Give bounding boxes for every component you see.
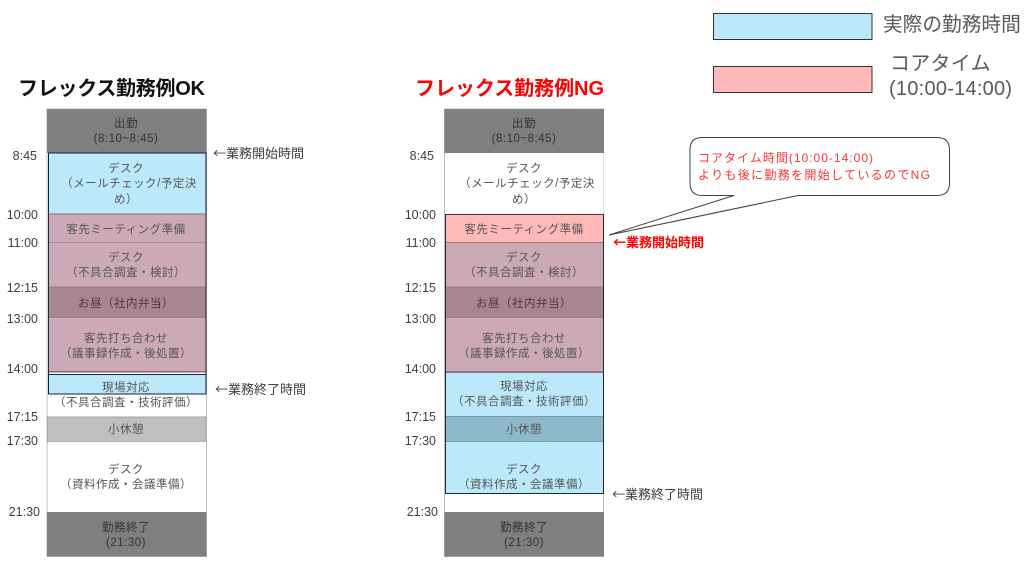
block: end of work: (21:30) bbox=[504, 537, 544, 549]
block: arrival: (8:10~8:45) bbox=[94, 133, 158, 145]
block: short break bbox=[446, 416, 604, 442]
time axis: OK example: 12:15 bbox=[7, 281, 38, 295]
block: client meeting: 客先打ち合わせ bbox=[84, 331, 168, 345]
block: desk, documents: （資料作成・会議準備） bbox=[60, 477, 192, 491]
block: client meeting bbox=[445, 318, 604, 373]
time axis: OK example: 13:00 bbox=[7, 312, 38, 326]
block: client meeting: 客先打ち合わせ bbox=[482, 331, 566, 345]
block: end of work: 勤務終了 bbox=[500, 520, 548, 534]
block: desk, defect investigation bbox=[446, 243, 604, 287]
block: desk, defect investigation: （不具合調査・検討） bbox=[66, 265, 186, 279]
time axis: OK example: 11:00 bbox=[8, 236, 38, 250]
block: desk, mail check bbox=[445, 153, 604, 214]
legend: actual working hours bbox=[714, 14, 1021, 40]
block: desk, defect investigation: （不具合調査・検討） bbox=[464, 265, 584, 279]
panel: OK example bbox=[7, 77, 306, 556]
note: end time: ←業務終了時間 bbox=[215, 379, 306, 398]
block: on-site support: 現場対応 bbox=[500, 380, 548, 393]
heading: OK example: フレックス勤務例OK bbox=[18, 77, 206, 100]
block: desk, defect investigation: デスク bbox=[108, 250, 144, 264]
legend: actual working hours: 実際の勤務時間 bbox=[883, 14, 1021, 36]
time axis: OK example: 17:15 bbox=[7, 410, 38, 424]
legend bbox=[714, 14, 1021, 100]
block: client meeting: （議事録作成・後処置） bbox=[60, 346, 192, 360]
block: lunch bbox=[446, 287, 604, 318]
time axis: OK example: 8:45 bbox=[13, 149, 37, 163]
block: on-site support: （不具合調査・技術評価） bbox=[54, 395, 198, 409]
block: end of work bbox=[47, 512, 206, 556]
block: on-site support bbox=[48, 374, 206, 409]
legend: core time: (10:00-14:00) bbox=[889, 78, 1012, 100]
actual work outline bbox=[446, 214, 604, 494]
block: desk, documents: （資料作成・会議準備） bbox=[458, 477, 590, 491]
block: desk, defect investigation bbox=[48, 243, 206, 287]
actual work outline bbox=[48, 214, 206, 374]
time axis: OK example: 14:00 bbox=[7, 362, 38, 376]
block: desk, mail check: （メールチェック/予定決 bbox=[61, 177, 197, 190]
callout: reason for NG: よりも後に勤務を開始しているのでNG bbox=[698, 168, 930, 182]
block: lunch bbox=[48, 287, 206, 318]
schedule column: OK example bbox=[47, 109, 206, 556]
block: client meeting preparation bbox=[48, 214, 206, 243]
block: arrival bbox=[444, 109, 604, 153]
time axis: NG example: 8:45 bbox=[410, 149, 434, 163]
time axis: OK example: 21:30 bbox=[9, 505, 40, 519]
block: desk, defect investigation: デスク bbox=[506, 250, 542, 264]
callout: reason for NG bbox=[609, 138, 950, 235]
note: start time: ←業務開始時間 bbox=[213, 143, 304, 162]
note: end time: ←業務終了時間 bbox=[612, 484, 703, 503]
block: on-site support: 現場対応 bbox=[102, 381, 150, 394]
callout: reason for NG: コアタイム時間(10:00-14:00) bbox=[698, 151, 873, 165]
block: end of work: 勤務終了 bbox=[102, 520, 150, 534]
note: start time: ←業務開始時間 bbox=[613, 232, 704, 251]
block: desk, mail check: め） bbox=[114, 193, 138, 206]
block: arrival bbox=[47, 109, 206, 153]
panel: NG example bbox=[405, 77, 950, 556]
block: arrival: (8:10~8:45) bbox=[492, 133, 556, 145]
legend: core time bbox=[714, 52, 1012, 100]
block: desk, documents: デスク bbox=[108, 462, 144, 476]
legend: core time: コアタイム bbox=[890, 52, 991, 75]
block: arrival: 出勤 bbox=[512, 116, 536, 130]
block: client meeting: （議事録作成・後処置） bbox=[458, 346, 590, 360]
block: desk, mail check: デスク bbox=[108, 161, 144, 175]
block: arrival: 出勤 bbox=[114, 116, 138, 130]
block: short break: 小休憩 bbox=[108, 422, 144, 436]
time axis: NG example: 21:30 bbox=[407, 505, 438, 519]
time axis: OK example: 10:00 bbox=[7, 208, 38, 222]
block: desk, documents: デスク bbox=[506, 462, 542, 476]
time axis: OK example bbox=[7, 149, 40, 519]
block: on-site support bbox=[446, 373, 604, 417]
time axis: NG example: 10:00 bbox=[405, 208, 436, 222]
block: on-site support: （不具合調査・技術評価） bbox=[452, 394, 596, 408]
block: desk, mail check: め） bbox=[512, 193, 536, 206]
block: client meeting preparation bbox=[446, 214, 604, 243]
heading: NG example: フレックス勤務例NG bbox=[415, 77, 604, 100]
time axis: NG example: 12:15 bbox=[405, 281, 436, 295]
time axis: OK example: 17:30 bbox=[7, 434, 38, 448]
block: short break: 小休憩 bbox=[506, 422, 542, 436]
time axis: NG example: 14:00 bbox=[405, 362, 436, 376]
block: end of work: (21:30) bbox=[106, 537, 146, 549]
block: lunch: お昼（社内弁当） bbox=[78, 296, 174, 310]
block: client meeting preparation: 客先ミーティング準備 bbox=[66, 222, 186, 236]
block: client meeting bbox=[48, 318, 206, 373]
block: end of work bbox=[444, 512, 604, 556]
block: desk, mail check bbox=[48, 153, 206, 214]
block: short break bbox=[48, 417, 206, 442]
time axis: NG example bbox=[405, 149, 438, 519]
block: lunch: お昼（社内弁当） bbox=[476, 296, 572, 310]
schedule column: NG example bbox=[444, 109, 604, 556]
block: desk, documents bbox=[446, 442, 604, 494]
block: desk, documents bbox=[48, 442, 206, 512]
block: client meeting preparation: 客先ミーティング準備 bbox=[464, 222, 584, 236]
block: desk, mail check: （メールチェック/予定決 bbox=[459, 177, 595, 190]
block: desk, mail check: デスク bbox=[506, 161, 542, 175]
time axis: NG example: 17:15 bbox=[405, 410, 436, 424]
time axis: NG example: 13:00 bbox=[405, 312, 436, 326]
time axis: NG example: 11:00 bbox=[406, 236, 436, 250]
time axis: NG example: 17:30 bbox=[405, 434, 436, 448]
